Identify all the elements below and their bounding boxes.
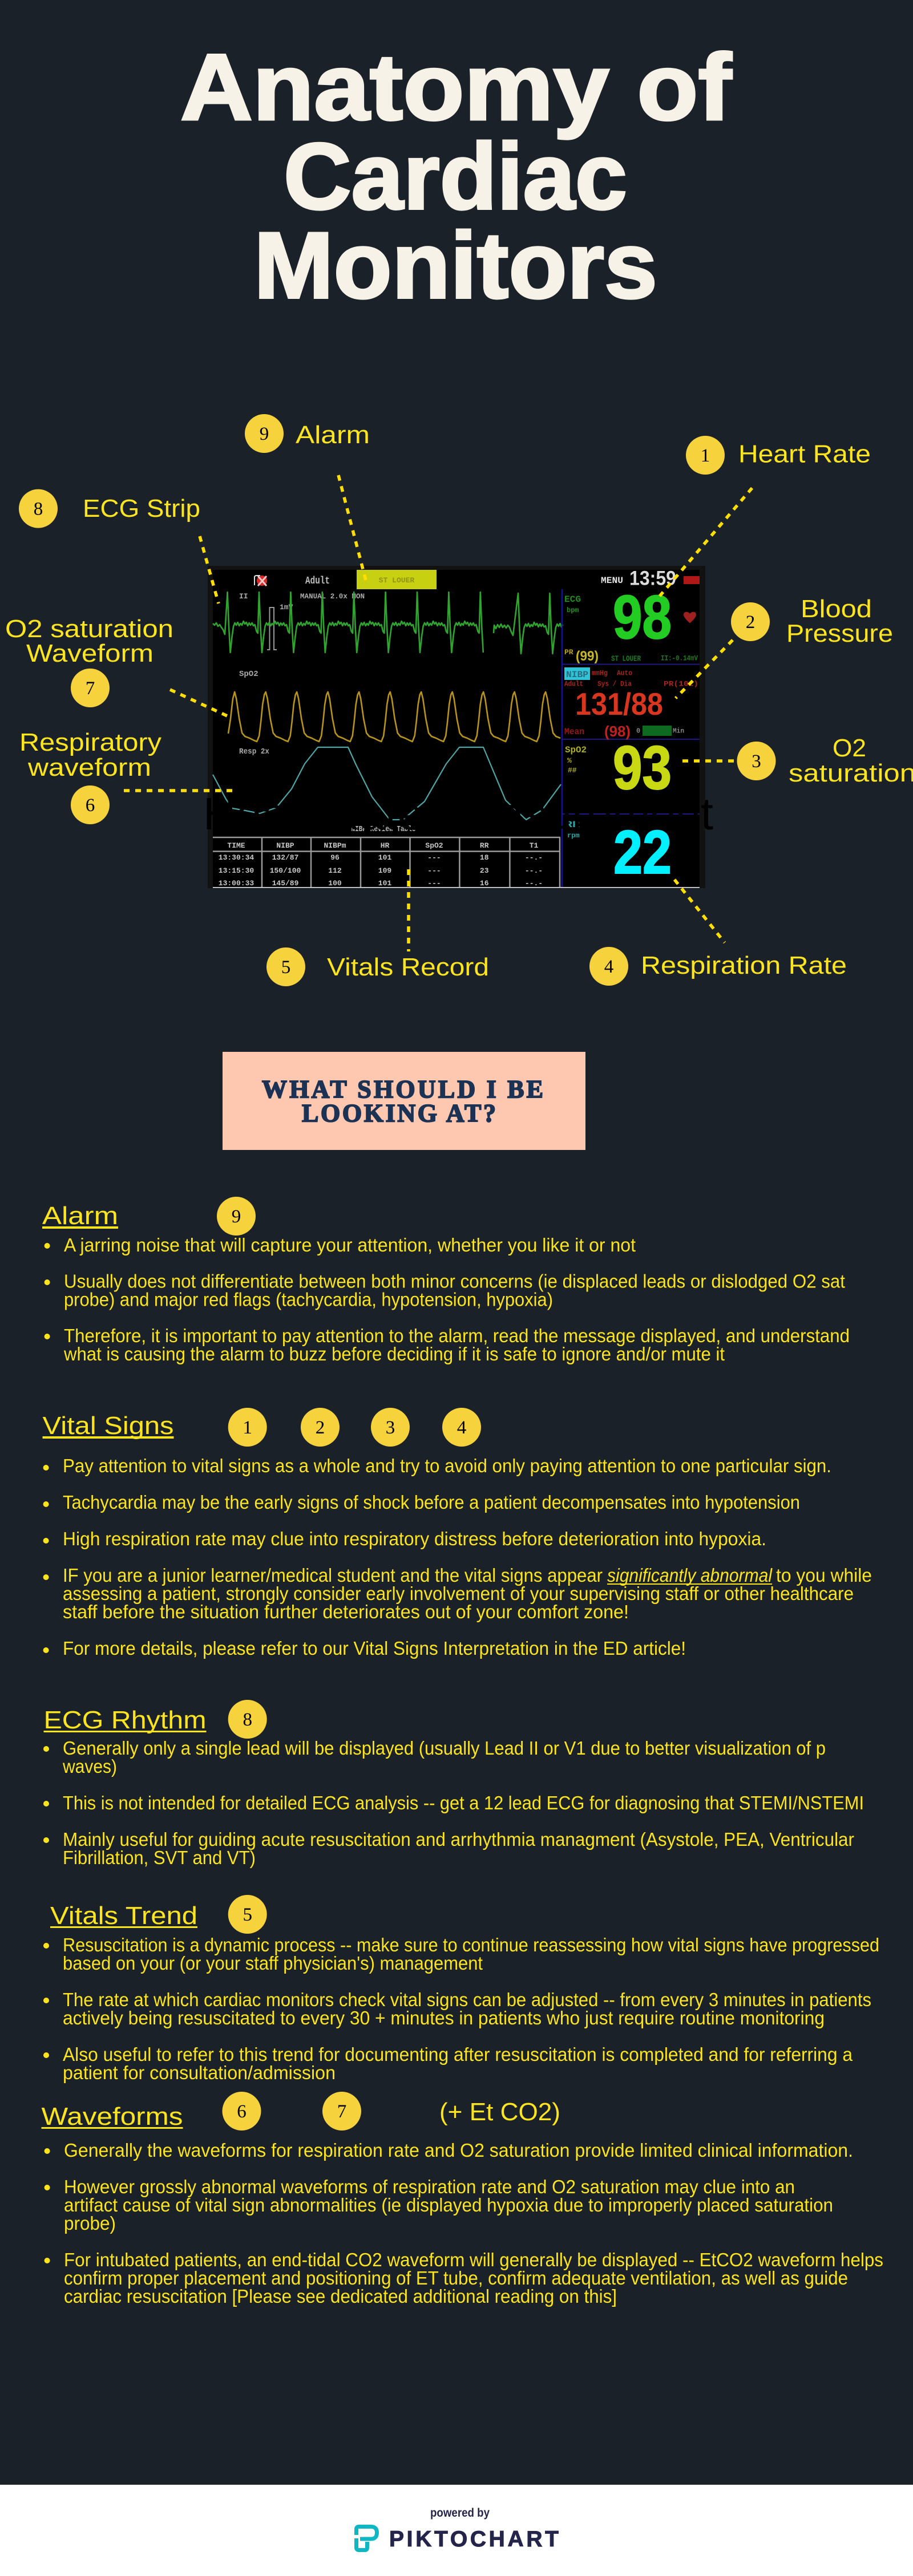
bullet list: ECG rhythm: Fibrillation, SVT and VT) [63, 1847, 256, 1868]
title: Cardiac [284, 124, 627, 229]
arrow: O2 waveform [170, 690, 227, 716]
callout 2: blood pressure: Blood [801, 595, 872, 623]
vitals record table: --.- [525, 879, 543, 888]
respiration rate readout: 22 [613, 817, 672, 886]
icon: muted alarm [254, 576, 267, 586]
callout 9: alarm [245, 414, 370, 453]
bullet list: waveforms [45, 2140, 883, 2307]
callout 6: respiratory waveform: Respiratory [19, 728, 161, 756]
vitals record table: NIBP [276, 841, 294, 850]
arrow: alarm [338, 475, 366, 580]
number badges 6 and 7: 6 [237, 2101, 247, 2122]
heart rate readout [564, 582, 698, 664]
vitals record table: 18 [480, 853, 489, 862]
number badge 8: 8 [243, 1710, 252, 1730]
number badges 1 to 4 [228, 1408, 481, 1447]
bullet list: alarm: Usually does not differentiate between both minor concerns (ie displaced leads or dislodged O2 sat [64, 1271, 845, 1292]
bullet list: vitals trend: actively being resuscitated to every 30 + minutes in patients who just require routine monitoring [63, 2007, 825, 2028]
vitals record table: 112 [328, 866, 342, 875]
callout 5: vitals record [266, 947, 489, 986]
section: vitals trend [43, 1895, 879, 2083]
blood pressure readout: Adult [564, 680, 583, 688]
callout 3: O2 saturation: O2 [833, 734, 866, 762]
vitals record table: 23 [480, 866, 489, 875]
bullet list: waveforms: probe) [64, 2213, 116, 2234]
number badge 8 [228, 1700, 267, 1739]
SpO2 waveform: SpO2 [239, 670, 258, 679]
number badges 1 to 4: 4 [457, 1417, 466, 1438]
SpO2 waveform [228, 670, 560, 742]
panel dividers [561, 589, 563, 887]
bullet list: vitals trend: patient for consultation/admission [63, 2062, 336, 2083]
oxygen saturation readout: ## [568, 766, 577, 775]
EtCO2 note: (+ Et CO2) [439, 2098, 560, 2126]
number badges 6 and 7: 7 [337, 2101, 346, 2122]
heart rate readout: II:-0.14mV [661, 654, 698, 663]
Piktochart wordmark: PIKTOCHART [389, 2527, 559, 2551]
bullet list: alarm: Therefore, it is important to pay attention to the alarm, read the message displayed, and understand [64, 1325, 850, 1346]
respiratory waveform: Resp 2x [239, 747, 270, 756]
section: ECG rhythm [43, 1700, 864, 1868]
alarm message banner: ST LOUER [379, 576, 414, 585]
respiration rate readout: RR [565, 820, 580, 830]
blood pressure readout: Auto [617, 669, 632, 678]
vitals record table: 109 [378, 866, 391, 875]
bullet list: vital signs: staff before the situation further deteriorates out of your comfort zone! [63, 1601, 629, 1622]
vitals record table: T1 [530, 841, 538, 850]
blood pressure readout: Sys / Dia [597, 680, 632, 688]
blood pressure readout: (98) [604, 723, 631, 740]
callout 7: O2 saturation waveform: O2 saturation [5, 615, 173, 643]
arrow: blood pressure [676, 640, 733, 698]
blood pressure readout: 131/88 [575, 686, 663, 722]
section heading: vital signs: Vital Signs [42, 1412, 173, 1440]
vitals record table: RR [480, 841, 489, 850]
vitals record table: --.- [525, 866, 543, 875]
heart rate readout: PR [564, 648, 573, 657]
callout 1: heart rate [686, 436, 871, 475]
section: alarm [42, 1197, 850, 1364]
oxygen saturation readout: SpO2 [565, 745, 587, 755]
alarm message banner [357, 570, 437, 589]
oxygen saturation readout [565, 733, 672, 802]
bullet list: vital signs: High respiration rate may clue into respiratory distress before deterioration into hypoxia. [63, 1528, 766, 1549]
callout 4: respiration rate: 4 [604, 957, 613, 977]
clock and battery [601, 567, 700, 590]
title [180, 34, 732, 318]
callout 6: respiratory waveform: waveform [27, 754, 151, 781]
heart rate readout: ECG [564, 594, 581, 605]
heart rate readout: 98 [613, 582, 672, 651]
stray black caption over monitor: Heart Rate Measurement [203, 788, 713, 839]
bullet list: vital signs: Tachycardia may be the early signs of shock before a patient decompensates into hypotension [63, 1492, 800, 1513]
callout 9: alarm: 9 [260, 424, 269, 444]
callout 2: blood pressure [731, 595, 893, 647]
bullet list: alarm: what is causing the alarm to buzz before deciding if it is safe to ignore and/or mute it [63, 1343, 725, 1364]
bullet list: vital signs: Pay attention to vital signs as a whole and try to avoid only paying attention to one particular sign. [63, 1455, 831, 1476]
vitals record table: TIME [227, 841, 245, 850]
blood pressure readout: mmHg [592, 669, 608, 678]
callout 2: blood pressure: Pressure [786, 619, 893, 647]
footer: Piktochart branding [0, 2485, 913, 2576]
callout 7: O2 saturation waveform [5, 615, 173, 707]
bullet list: vital signs: assessing a patient, strongly consider early involvement of your supervising staff or other healthcare [63, 1583, 854, 1604]
blood pressure readout: NIBP [566, 670, 588, 680]
arrow: respiration rate [674, 880, 725, 942]
callout 5: vitals record: Vitals Record [327, 953, 489, 981]
number badge 9: 9 [232, 1206, 241, 1227]
heart rate readout: bpm [567, 606, 579, 614]
callout 9: alarm: Alarm [296, 421, 370, 449]
blood pressure readout [564, 667, 698, 740]
number badge 5 [228, 1895, 267, 1934]
callout 6: respiratory waveform: 6 [86, 795, 95, 816]
vitals record table: 16 [480, 879, 489, 888]
patient mode label: Adult [305, 576, 330, 587]
number badge 9 [217, 1197, 256, 1236]
bullet list: alarm: A jarring noise that will capture your attention, whether you like it or not [64, 1234, 636, 1255]
callout 7: O2 saturation waveform: 7 [86, 678, 95, 699]
section heading: alarm: Alarm [42, 1202, 118, 1230]
bullet list: vitals trend: based on your (or your staff physician's) management [63, 1953, 483, 1974]
arrow: vitals record [407, 869, 410, 951]
ECG waveform: II [239, 592, 248, 601]
respiration rate readout [565, 817, 672, 886]
blood pressure readout: Mean [564, 727, 584, 737]
icon: Piktochart logo [356, 2527, 377, 2550]
bullet list: ECG rhythm [43, 1737, 864, 1868]
bullet list: alarm [45, 1234, 850, 1364]
vitals record table: NIBP Review Table [352, 825, 415, 834]
callout 3: O2 saturation: saturation [789, 759, 913, 787]
bullet list: vital signs: IF you are a junior learner/medical student and the vital signs appear [63, 1565, 603, 1586]
bullet list: waveforms: Generally the waveforms for respiration rate and O2 saturation provide limited clinical information. [64, 2140, 853, 2161]
vitals record table: 13:15:30 [219, 866, 254, 875]
bullet list: vital signs: significantly abnormal [607, 1565, 773, 1586]
bullet list: vitals trend: Also useful to refer to this trend for documenting after resuscitation is completed and for referring a [63, 2044, 853, 2065]
vitals record table: 13:30:34 [219, 853, 254, 862]
heading banner: WHAT SHOULD I BE [262, 1075, 543, 1103]
heading banner [223, 1052, 585, 1150]
oxygen saturation readout: 93 [613, 733, 672, 802]
bullet list: waveforms: However grossly abnormal waveforms of respiration rate and O2 saturation may clue into an [64, 2176, 795, 2197]
bullet list: vital signs: to you while [776, 1565, 872, 1586]
vitals record table: --.- [525, 853, 543, 862]
bullet list: waveforms: artifact cause of vital sign abnormalities (ie displayed hypoxia due to improperly placed saturation [64, 2194, 833, 2215]
title: Anatomy of [180, 34, 732, 139]
heart rate readout: ST LOUER [611, 655, 641, 664]
vitals record table: 150/100 [270, 866, 301, 875]
number badges 1 to 4: 2 [316, 1417, 325, 1438]
heart rate readout: (99) [576, 649, 599, 664]
arrow: respiratory waveform [124, 789, 233, 792]
oxygen saturation readout: % [567, 756, 572, 765]
respiration rate readout: rpm [567, 832, 580, 840]
ECG waveform [213, 592, 563, 654]
callout 2: blood pressure: 2 [746, 612, 755, 633]
callout 8: ECG strip: 8 [34, 499, 43, 520]
vitals record table [213, 825, 700, 888]
vitals record table: SpO2 [425, 841, 443, 850]
vitals record table: 100 [328, 879, 342, 888]
bullet list: vitals trend: The rate at which cardiac monitors check vital signs can be adjusted -- from every 3 minutes in patients [63, 1989, 871, 2010]
powered by text: powered by [430, 2506, 490, 2520]
section heading: waveforms: Waveforms [41, 2103, 183, 2131]
callout 1: heart rate: 1 [701, 445, 710, 466]
bullet list: waveforms: For intubated patients, an end-tidal CO2 waveform will generally be displayed -- EtCO2 waveform helps [64, 2249, 883, 2270]
bullet list: vital signs: For more details, please refer to our Vital Signs Interpretation in the ED article! [63, 1638, 686, 1659]
callout 7: O2 saturation waveform: Waveform [26, 639, 153, 667]
blood pressure readout: PR(102) [664, 680, 698, 688]
callout 6: respiratory waveform [19, 728, 161, 824]
bullet list: alarm: probe) and major red flags (tachycardia, hypotension, hypoxia) [64, 1289, 553, 1310]
bullet list: ECG rhythm: Generally only a single lead will be displayed (usually Lead II or V1 due to better visualization of p [63, 1737, 826, 1759]
section: vital signs [42, 1408, 872, 1659]
blood pressure readout: Min [673, 727, 684, 735]
section heading: ECG rhythm: ECG Rhythm [43, 1706, 207, 1734]
callout 8: ECG strip [19, 489, 200, 528]
section heading: vitals trend: Vitals Trend [50, 1902, 197, 1930]
callout 4: respiration rate [589, 947, 847, 986]
vitals record table: 13:00:33 [219, 879, 254, 888]
vitals record table: 96 [330, 853, 340, 862]
vitals record table: --- [427, 866, 441, 875]
callout 3: O2 saturation: 3 [752, 751, 761, 772]
vitals record table: 132/87 [272, 853, 298, 862]
bullet list: vital signs [43, 1455, 872, 1659]
number badges 1 to 4: 3 [386, 1417, 395, 1438]
vitals record table: 101 [378, 879, 391, 888]
ECG waveform: MANUAL 2.0x MON [300, 592, 365, 601]
number badge 5: 5 [243, 1905, 252, 1925]
clock and battery: 13:59 [629, 567, 676, 590]
respiratory waveform [213, 747, 561, 820]
bullet list: waveforms: cardiac resuscitation [Please see dedicated additional reading on this] [64, 2286, 617, 2307]
vitals record table: --- [427, 879, 441, 888]
panel: cardiac monitor screen [208, 566, 705, 888]
vitals record table: 145/89 [272, 879, 299, 888]
arrow: heart rate [660, 488, 752, 596]
callout 3: O2 saturation [737, 734, 913, 787]
callout 1: heart rate: Heart Rate [738, 440, 871, 468]
bullet list: ECG rhythm: This is not intended for detailed ECG analysis -- get a 12 lead ECG for diagnosing that STEMI/NSTEMI [63, 1792, 864, 1813]
vitals record table: 101 [378, 853, 391, 862]
callout 5: vitals record: 5 [281, 957, 290, 978]
blood pressure readout: 0 [636, 727, 640, 735]
bullet list: vitals trend [43, 1934, 879, 2083]
clock and battery: MENU [601, 576, 623, 586]
arrow: O2 saturation [682, 759, 735, 763]
vitals record table: NIBPm [324, 841, 346, 850]
vitals record table: HR [381, 841, 389, 850]
bullet list: waveforms: confirm proper placement and positioning of ET tube, confirm adequate ventilation, as well as guide [64, 2267, 848, 2289]
heading banner: LOOKING AT? [302, 1099, 496, 1127]
title: Monitors [254, 213, 657, 318]
number badges 1 to 4: 1 [243, 1417, 252, 1438]
arrow: ECG strip [200, 536, 219, 604]
callout 8: ECG strip: ECG Strip [83, 495, 200, 523]
number badges 6 and 7 [223, 2092, 361, 2131]
bullet list: ECG rhythm: waves) [62, 1756, 117, 1777]
ECG waveform: 1mV [280, 603, 293, 611]
section: waveforms [41, 2092, 883, 2307]
bullet list: ECG rhythm: Mainly useful for guiding acute resuscitation and arrhythmia managment (Asystole, PEA, Ventricular [63, 1829, 854, 1850]
vitals record table: --- [427, 853, 441, 862]
callout 4: respiration rate: Respiration Rate [641, 951, 847, 979]
